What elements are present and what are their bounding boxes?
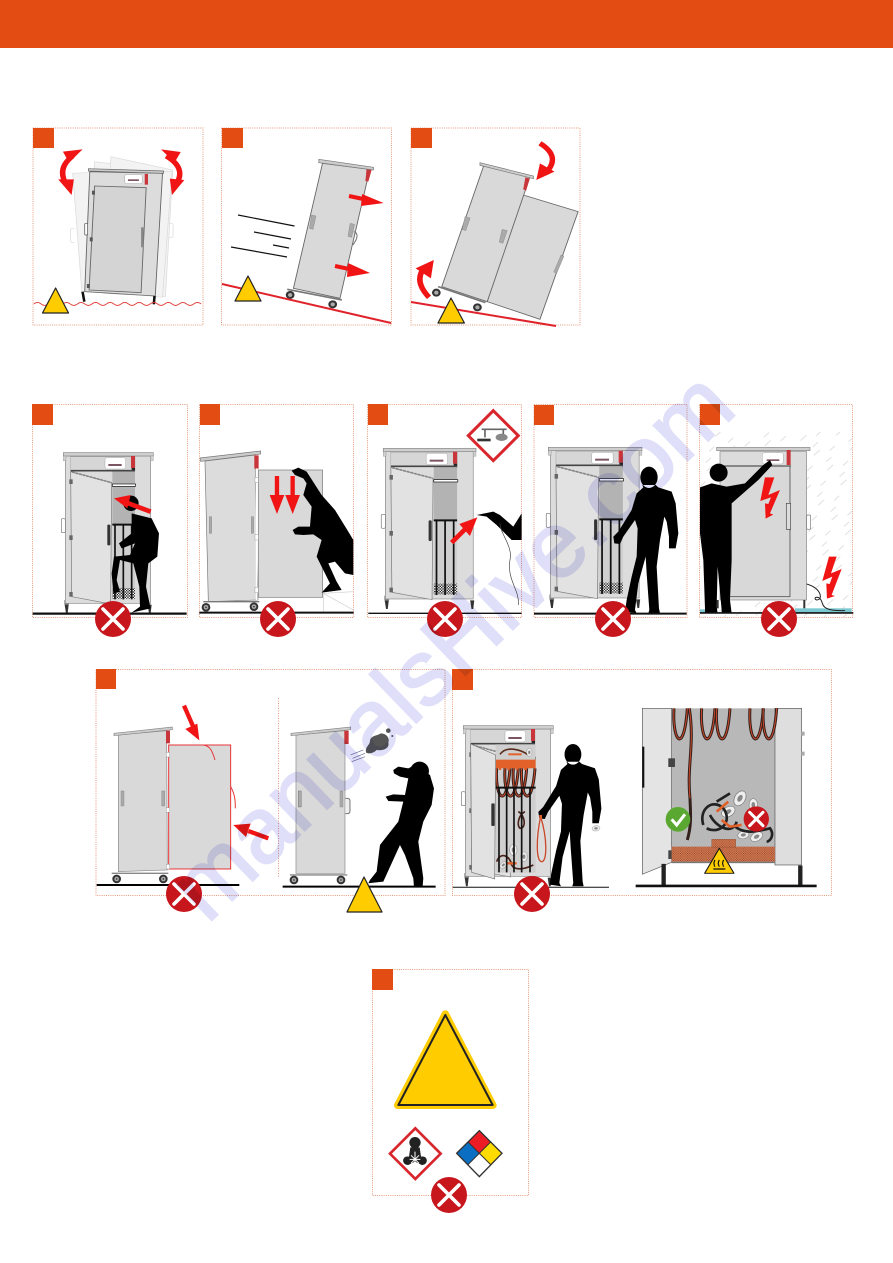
panel: cabinet on slope <box>222 128 392 325</box>
step badge <box>368 404 388 425</box>
illustration: tipping cabinet <box>432 163 578 319</box>
sloped floor <box>411 302 556 326</box>
step badge <box>96 669 116 689</box>
step badge <box>534 405 554 425</box>
no symbol <box>427 601 463 637</box>
illustration: cabinet and standing person <box>534 447 687 614</box>
no symbol <box>431 1177 467 1213</box>
warning triangle <box>438 298 464 323</box>
illustration: closed cabinet with person and lightning <box>700 447 853 613</box>
illustration: cabinet with debris and ducking person <box>283 727 436 887</box>
illustration: cabinet with damaged door <box>97 706 268 885</box>
warning triangle <box>42 288 68 313</box>
header bar <box>0 0 893 48</box>
step badge <box>32 404 53 425</box>
no symbol <box>595 601 631 637</box>
illustration: tilted cabinet <box>286 159 373 308</box>
illustration: cabinet interior close-up <box>636 708 817 886</box>
illustration: open cabinet with person <box>33 453 187 614</box>
no symbol <box>260 601 296 637</box>
panel: cabinet on uneven floor <box>33 128 203 325</box>
illustration: cabinet, door and leaning person <box>199 451 354 613</box>
icon: corrosive hazard diamond <box>468 411 518 461</box>
step badge <box>452 669 473 690</box>
divider <box>278 698 280 878</box>
step badge <box>372 969 393 990</box>
step badge <box>700 404 720 425</box>
icon: large warning triangle <box>398 1014 493 1105</box>
panel: electric shock in rain <box>700 404 853 637</box>
arrows: tipping rotation <box>416 143 554 297</box>
arrows: tipping direction <box>335 194 384 277</box>
illustration: cabinet with cables and person <box>453 726 609 887</box>
panel: person beside open cabinet <box>534 404 687 637</box>
icon: correct check <box>666 807 690 832</box>
sloped floor <box>222 284 391 323</box>
no symbol <box>761 601 797 637</box>
icon: NFPA diamond <box>457 1131 502 1177</box>
warning triangle <box>235 276 261 301</box>
icon: health hazard diamond <box>390 1128 441 1179</box>
panel: person pushing open door <box>199 404 354 637</box>
warning triangle <box>347 877 382 912</box>
watermark: manualsHive.com <box>149 351 753 939</box>
panel: person climbing into cabinet <box>32 404 188 637</box>
rain <box>700 432 852 617</box>
no symbol <box>514 876 550 912</box>
panel: no water jet cleaning <box>368 404 522 637</box>
panel: damaged door and flying debris <box>96 669 445 912</box>
step badge <box>411 128 432 148</box>
arrows: rocking <box>58 149 184 195</box>
step badge <box>200 404 220 425</box>
no symbol <box>95 601 131 637</box>
icon: wrong cross <box>744 806 769 832</box>
panel: cabinet tipping with open door <box>411 128 580 326</box>
speed lines <box>231 215 294 257</box>
step badge <box>33 128 54 148</box>
icon: hot surface warning <box>705 848 734 873</box>
no symbol <box>166 876 202 912</box>
panel: hazardous substances warning <box>372 969 528 1213</box>
illustration: wobbling cabinet <box>71 157 173 304</box>
step badge <box>222 128 243 148</box>
wavy floor line <box>34 302 201 305</box>
panel: cable storage <box>452 669 832 912</box>
illustration: cabinet with spray gun <box>368 448 522 613</box>
